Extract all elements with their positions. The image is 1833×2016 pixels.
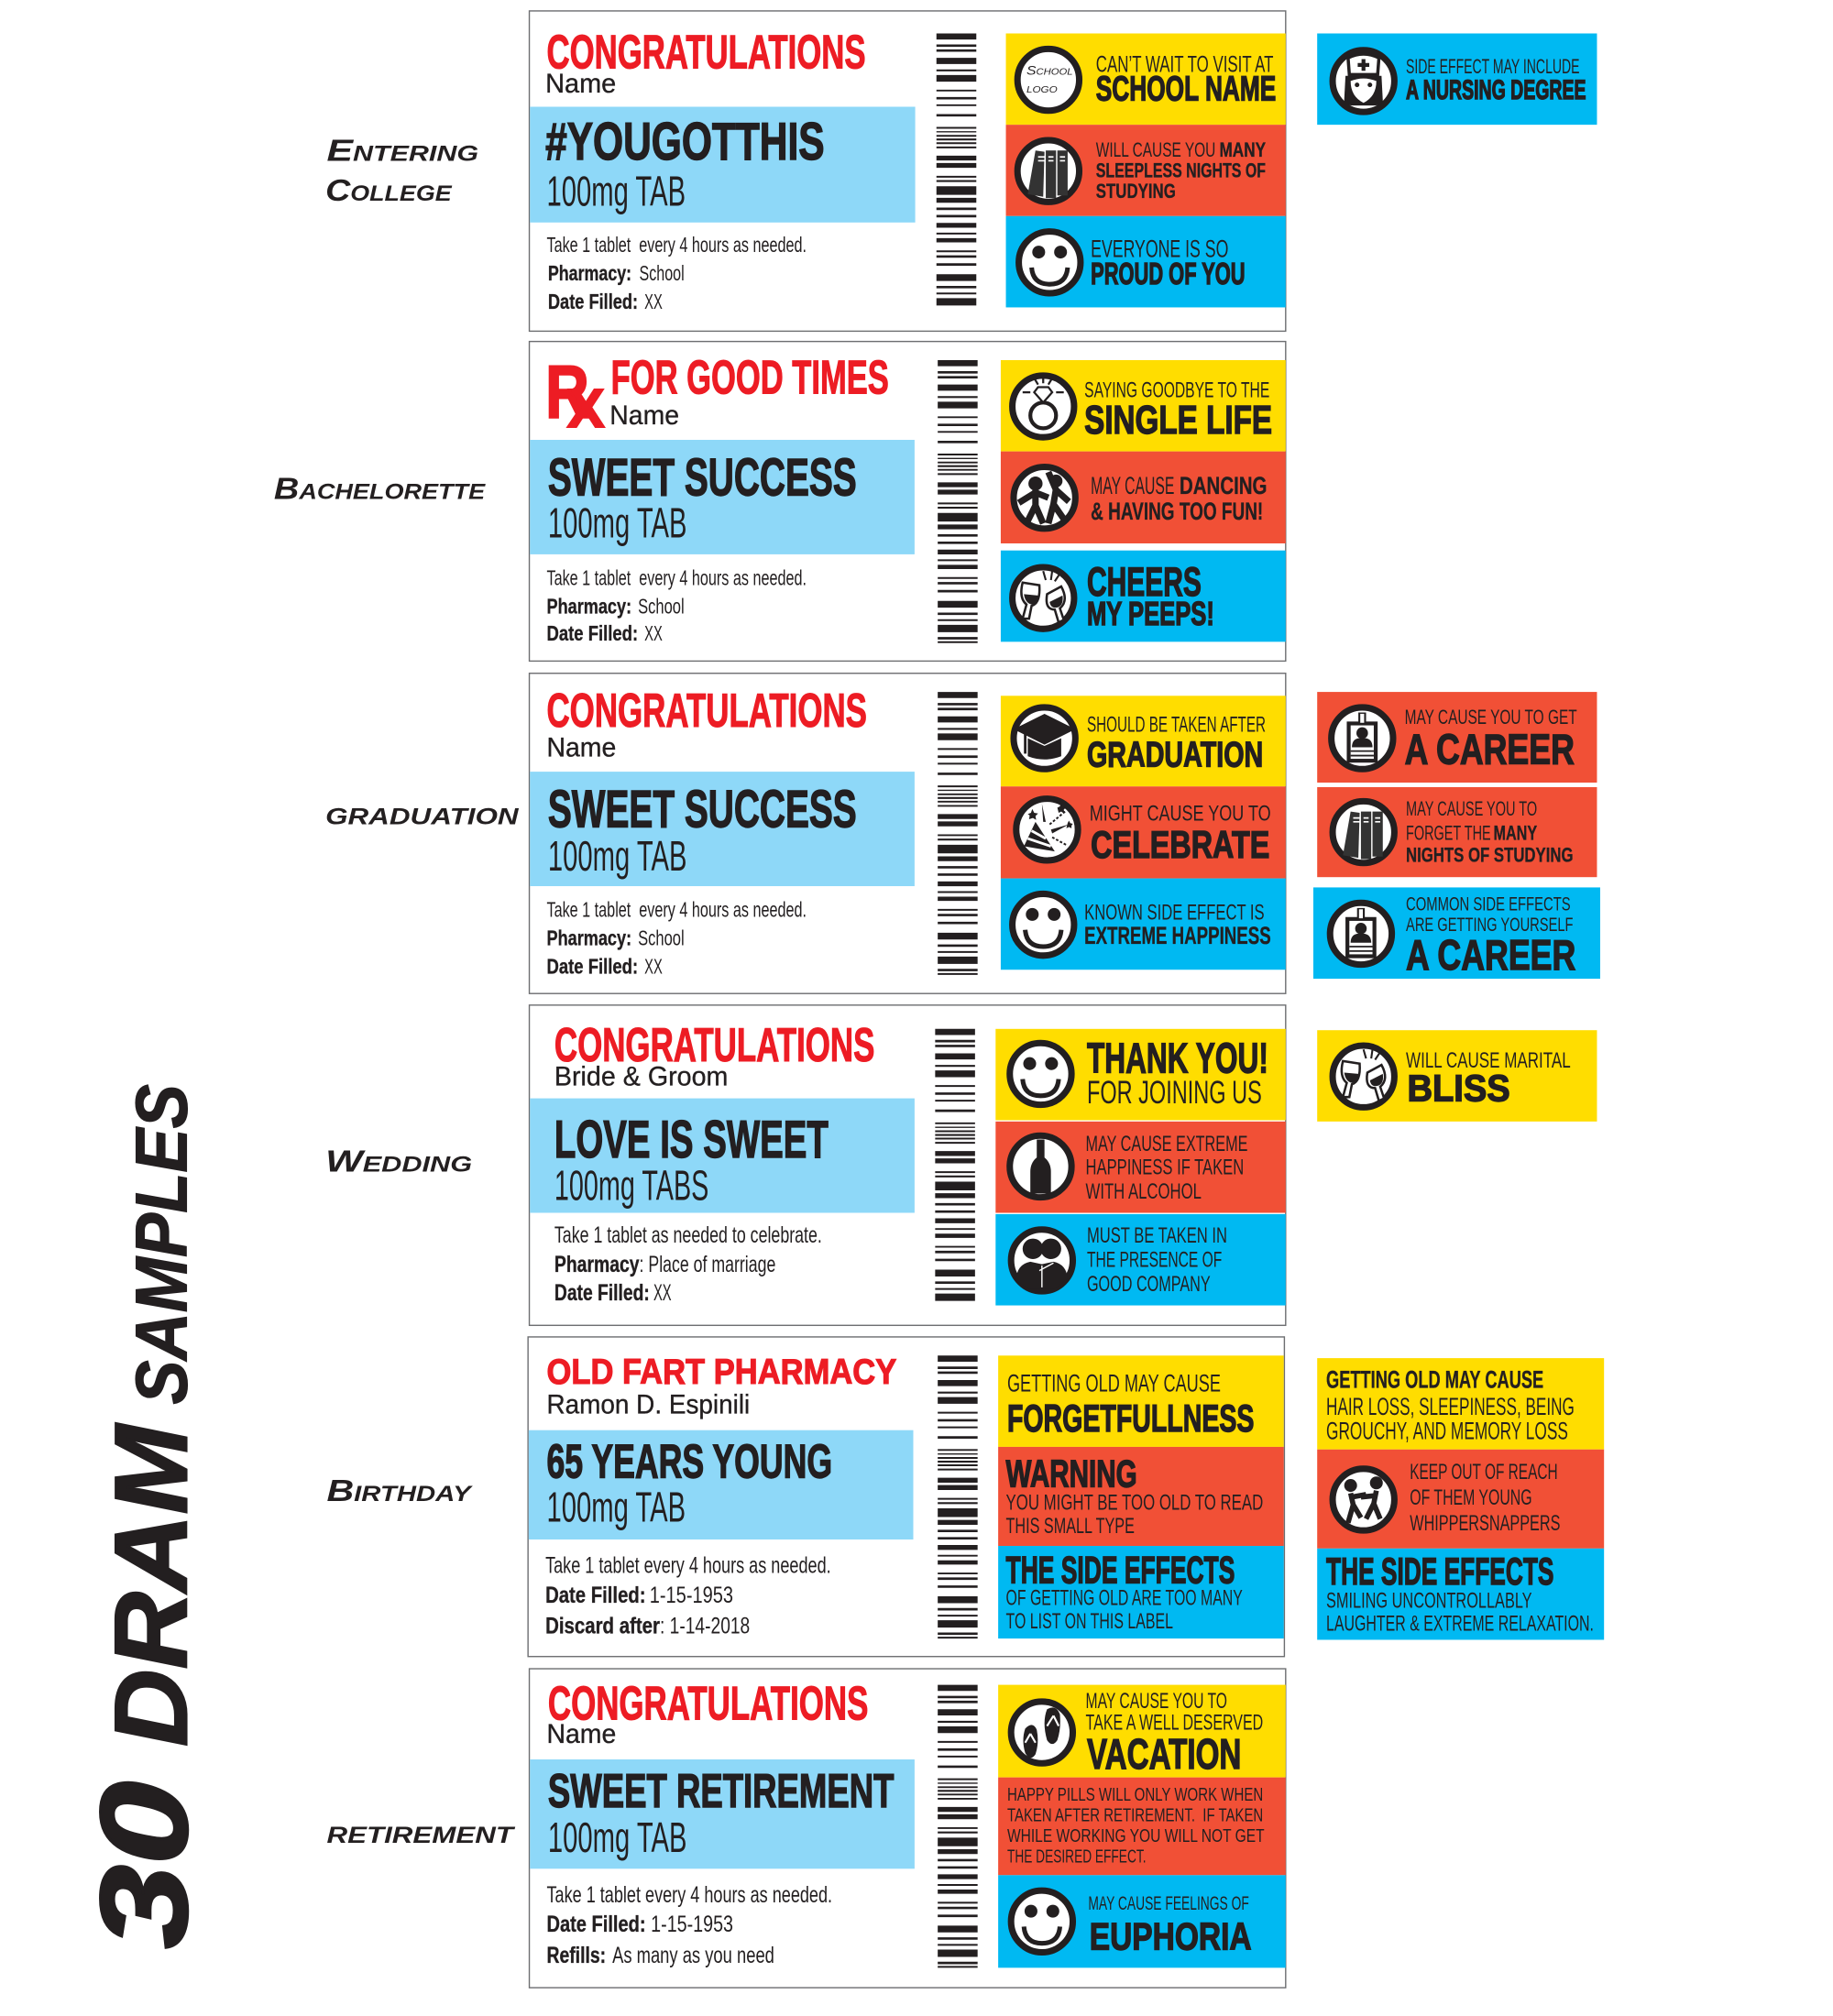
warning: too old to read: THIS SMALL TYPE bbox=[1006, 1514, 1135, 1539]
directions text: Refills: bbox=[546, 1944, 606, 1968]
sticker: getting old: GROUCHY, AND MEMORY LOSS bbox=[1326, 1418, 1568, 1445]
category label: entering college: College bbox=[325, 174, 453, 208]
directions text: : Place of marriage bbox=[640, 1253, 775, 1277]
sticker: a career: MAY CAUSE YOU TO GET bbox=[1405, 706, 1577, 729]
panel: bachelorette label bbox=[530, 342, 1286, 661]
directions text: Pharmacy bbox=[554, 1253, 640, 1277]
directions text: XX bbox=[644, 621, 663, 645]
warning: extreme happiness: KNOWN SIDE EFFECT IS bbox=[1084, 901, 1265, 926]
blue band: drug name: #YOUGOTTHIS bbox=[545, 113, 825, 171]
directions text: 1-15-1953 bbox=[650, 1583, 733, 1608]
warning: thank you: THANK YOU! bbox=[1087, 1035, 1268, 1082]
warning: vacation: VACATION bbox=[1087, 1730, 1241, 1778]
warning: extreme happiness bbox=[1001, 879, 1286, 970]
warning: school name: SCHOOL NAME bbox=[1096, 70, 1276, 108]
blue band: drug name: 100mg TAB bbox=[548, 499, 686, 547]
warning: the side effects: THE SIDE EFFECTS bbox=[1006, 1549, 1235, 1592]
blue band: drug name bbox=[530, 1759, 915, 1868]
side sticker: marital bliss bbox=[1317, 1030, 1597, 1122]
side sticker: nursing degree: A NURSING DEGREE bbox=[1406, 75, 1586, 105]
directions text: Pharmacy: bbox=[548, 261, 631, 285]
directions text bbox=[546, 566, 807, 645]
sticker: nights of studying: MAY CAUSE YOU TO bbox=[1406, 797, 1537, 820]
warning: alcohol: WITH ALCOHOL bbox=[1086, 1179, 1202, 1204]
sticker: the side effects: LAUGHTER & EXTREME RELAXATION. bbox=[1326, 1612, 1594, 1637]
warning: good company: MUST BE TAKEN IN bbox=[1087, 1223, 1227, 1248]
warning: euphoria: MAY CAUSE FEELINGS OF bbox=[1088, 1893, 1249, 1914]
sticker: a career bbox=[1317, 692, 1597, 783]
heading: for good times: FOR GOOD TIMES bbox=[611, 351, 889, 404]
warning: single life bbox=[1001, 360, 1286, 452]
category label: entering college: Entering bbox=[326, 134, 478, 168]
warning: the side effects: TO LIST ON THIS LABEL bbox=[1006, 1609, 1173, 1634]
warning: celebrate: MIGHT CAUSE YOU TO bbox=[1090, 801, 1271, 826]
warning: cheers bbox=[1001, 551, 1286, 641]
blue band: drug name: 100mg TAB bbox=[548, 832, 686, 880]
recipient name: Name bbox=[546, 732, 616, 762]
warning: alcohol: MAY CAUSE EXTREME bbox=[1086, 1132, 1247, 1156]
directions text: Date Filled: bbox=[548, 290, 638, 313]
recipient name: Name bbox=[545, 69, 616, 99]
heading: old fart pharmacy: OLD FART PHARMACY bbox=[546, 1352, 896, 1392]
panel: wedding label bbox=[530, 1005, 1286, 1325]
panel: entering college label bbox=[530, 11, 1286, 331]
category label: entering college bbox=[325, 134, 478, 208]
warning: happy pills bbox=[998, 1778, 1286, 1875]
heading: congratulations: CONGRATULATIONS bbox=[548, 1677, 868, 1730]
blue band: drug name bbox=[529, 1430, 913, 1539]
directions text: 1-15-1953 bbox=[651, 1912, 733, 1937]
directions text: Date Filled: bbox=[546, 1912, 646, 1937]
warning: sleepless nights: MANY bbox=[1220, 138, 1266, 161]
warning: thank you: FOR JOINING US bbox=[1087, 1075, 1262, 1111]
panel: birthday label bbox=[528, 1337, 1284, 1657]
blue band: drug name: LOVE IS SWEET bbox=[554, 1111, 829, 1169]
title: 30 dram samples: 30 bbox=[75, 1781, 214, 1948]
warning: graduation: GRADUATION bbox=[1087, 734, 1263, 774]
blue band: drug name: 65 YEARS YOUNG bbox=[546, 1436, 832, 1489]
barcode bbox=[938, 1685, 978, 1967]
sticker: nights of studying: NIGHTS OF STUDYING bbox=[1406, 843, 1573, 866]
blue band: drug name bbox=[530, 106, 916, 223]
sticker: getting old: GETTING OLD MAY CAUSE bbox=[1326, 1365, 1543, 1393]
warning: too old to read: WARNING bbox=[1006, 1452, 1137, 1495]
sticker: nights of studying bbox=[1317, 787, 1597, 877]
barcode bbox=[938, 692, 978, 975]
warning: dancing: DANCING bbox=[1180, 472, 1267, 499]
directions text bbox=[546, 233, 807, 313]
warning: school name: School bbox=[1026, 62, 1073, 77]
warning: forgetfullness: FORGETFULLNESS bbox=[1007, 1397, 1254, 1440]
warning: sleepless nights bbox=[1006, 125, 1286, 216]
directions text bbox=[554, 1223, 822, 1306]
directions text bbox=[546, 898, 807, 978]
directions text: XX bbox=[644, 290, 663, 313]
directions text: As many as you need bbox=[612, 1944, 774, 1968]
warning: extreme happiness: EXTREME HAPPINESS bbox=[1084, 922, 1271, 949]
directions text: Take 1 tablet every 4 hours as needed. bbox=[545, 1553, 831, 1578]
sticker: getting old: HAIR LOSS, SLEEPINESS, BEING bbox=[1326, 1393, 1575, 1420]
rx symbol: R bbox=[545, 351, 589, 434]
side stickers: birthday bbox=[1317, 1358, 1604, 1639]
sticker: getting old bbox=[1317, 1358, 1604, 1450]
warning: the side effects: OF GETTING OLD ARE TOO MANY bbox=[1006, 1586, 1243, 1611]
recipient name: Name bbox=[609, 400, 679, 431]
directions text: School bbox=[638, 926, 685, 950]
directions text: School bbox=[640, 261, 685, 285]
directions text: Pharmacy: bbox=[546, 926, 631, 950]
sticker: a career: A CAREER bbox=[1405, 726, 1575, 773]
warning: good company bbox=[995, 1214, 1286, 1306]
warning: proud of you bbox=[1006, 216, 1286, 307]
directions text: Date Filled: bbox=[545, 1583, 646, 1608]
warning: graduation: SHOULD BE TAKEN AFTER bbox=[1087, 713, 1266, 738]
recipient name: Bride & Groom bbox=[554, 1062, 728, 1092]
blue band: drug name: SWEET RETIREMENT bbox=[548, 1765, 895, 1818]
warning: dancing bbox=[1001, 452, 1286, 543]
warning: cheers: MY PEEPS! bbox=[1087, 595, 1214, 632]
warning: celebrate: CELEBRATE bbox=[1091, 823, 1269, 866]
directions text: Take 1 tablet every 4 hours as needed. bbox=[546, 898, 807, 922]
warning: alcohol bbox=[995, 1122, 1286, 1213]
side sticker: marital bliss: BLISS bbox=[1407, 1067, 1510, 1109]
warning: school name: CAN’T WAIT TO VISIT AT bbox=[1096, 52, 1273, 78]
barcode bbox=[937, 33, 976, 305]
sticker: common side effects: A CAREER bbox=[1406, 931, 1575, 979]
blue band: drug name: 100mg TAB bbox=[548, 1813, 686, 1861]
warning: good company: GOOD COMPANY bbox=[1087, 1272, 1211, 1297]
warning: celebrate bbox=[1001, 786, 1286, 879]
blue band: drug name: 100mg TABS bbox=[554, 1161, 708, 1209]
warning: euphoria: EUPHORIA bbox=[1090, 1915, 1252, 1958]
blue band: drug name: 100mg TAB bbox=[546, 168, 686, 215]
directions text: Take 1 tablet every 4 hours as needed. bbox=[546, 1883, 832, 1908]
side stickers: graduation bbox=[1313, 692, 1600, 979]
sticker: the side effects: SMILING UNCONTROLLABLY bbox=[1326, 1588, 1532, 1613]
side sticker: nursing degree bbox=[1317, 33, 1597, 125]
warning: sleepless nights: SLEEPLESS NIGHTS OF bbox=[1096, 159, 1266, 182]
blue band: drug name: 100mg TAB bbox=[546, 1483, 686, 1530]
directions text: Date Filled: bbox=[546, 954, 638, 978]
directions text: Take 1 tablet every 4 hours as needed. bbox=[546, 566, 807, 590]
directions text: Pharmacy: bbox=[546, 594, 631, 618]
warning: graduation bbox=[1001, 696, 1286, 786]
sticker: nights of studying: MANY bbox=[1493, 821, 1537, 844]
warning: the side effects bbox=[998, 1546, 1284, 1638]
blue band: drug name bbox=[530, 440, 915, 554]
recipient name: Name bbox=[546, 1719, 616, 1749]
blue band: drug name bbox=[530, 772, 915, 886]
sticker: the side effects: THE SIDE EFFECTS bbox=[1326, 1550, 1553, 1593]
directions text: Date Filled: bbox=[554, 1281, 650, 1306]
directions text: Discard after bbox=[545, 1614, 660, 1638]
side sticker: nursing degree: SIDE EFFECT MAY INCLUDE bbox=[1406, 55, 1580, 78]
warning: too old to read: YOU MIGHT BE TOO OLD TO READ bbox=[1006, 1491, 1263, 1516]
sticker: whippersnappers: KEEP OUT OF REACH bbox=[1410, 1460, 1558, 1485]
sticker: the side effects bbox=[1317, 1549, 1604, 1639]
warning: happy pills: HAPPY PILLS WILL ONLY WORK WHEN bbox=[1007, 1785, 1263, 1805]
warning: too old to read bbox=[998, 1447, 1284, 1546]
warning: single life: SINGLE LIFE bbox=[1084, 399, 1272, 443]
warning: vacation bbox=[998, 1685, 1286, 1778]
warning: vacation: TAKE A WELL DESERVED bbox=[1086, 1711, 1263, 1736]
title: 30 dram samples bbox=[75, 1084, 214, 1948]
warning: dancing: & HAVING TOO FUN! bbox=[1091, 498, 1263, 525]
sticker: common side effects bbox=[1313, 887, 1600, 979]
title: 30 dram samples: DRAM bbox=[93, 1423, 209, 1747]
warning: thank you bbox=[995, 1029, 1286, 1120]
panel: retirement label bbox=[530, 1669, 1286, 1988]
warning: proud of you: EVERYONE IS SO bbox=[1091, 236, 1228, 263]
sticker: whippersnappers bbox=[1317, 1450, 1604, 1549]
category label: birthday: Birthday bbox=[326, 1474, 473, 1508]
warning: cheers: CHEERS bbox=[1087, 558, 1202, 605]
directions text: School bbox=[638, 594, 685, 618]
warning: sleepless nights: STUDYING bbox=[1096, 180, 1176, 203]
warning: proud of you: PROUD OF YOU bbox=[1091, 257, 1246, 291]
directions text: Take 1 tablet every 4 hours as needed. bbox=[546, 233, 807, 257]
warning: dancing: MAY CAUSE bbox=[1091, 472, 1174, 499]
directions text bbox=[545, 1553, 831, 1638]
warning: school name bbox=[1006, 33, 1286, 125]
sticker: whippersnappers: WHIPPERSNAPPERS bbox=[1410, 1511, 1560, 1536]
sticker: common side effects: COMMON SIDE EFFECTS bbox=[1406, 894, 1571, 915]
blue band: drug name: SWEET SUCCESS bbox=[548, 448, 857, 507]
warning: sleepless nights: WILL CAUSE YOU bbox=[1096, 138, 1215, 161]
warning: single life: SAYING GOODBYE TO THE bbox=[1084, 378, 1269, 403]
panel: graduation label bbox=[530, 674, 1286, 993]
warning: happy pills: WHILE WORKING YOU WILL NOT GET bbox=[1007, 1826, 1265, 1846]
warning: good company: THE PRESENCE OF bbox=[1087, 1247, 1222, 1272]
heading: congratulations: CONGRATULATIONS bbox=[546, 685, 867, 738]
sticker: nights of studying: FORGET THE bbox=[1406, 821, 1491, 844]
blue band: drug name: SWEET SUCCESS bbox=[548, 780, 857, 838]
title: 30 dram samples: SAMPLES bbox=[121, 1084, 203, 1405]
warning: forgetfullness bbox=[998, 1355, 1284, 1447]
directions text: XX bbox=[644, 954, 663, 978]
category label: bachelorette: Bachelorette bbox=[274, 473, 486, 507]
warning: forgetfullness: GETTING OLD MAY CAUSE bbox=[1007, 1370, 1221, 1397]
directions text: Date Filled: bbox=[546, 621, 638, 645]
category label: graduation: GRADUATION bbox=[325, 805, 520, 830]
sticker: common side effects: ARE GETTING YOURSELF bbox=[1406, 915, 1574, 936]
category label: retirement: RETIREMENT bbox=[326, 1823, 516, 1848]
warning: alcohol: HAPPINESS IF TAKEN bbox=[1086, 1155, 1244, 1179]
directions text: Take 1 tablet as needed to celebrate. bbox=[554, 1223, 822, 1248]
warning: euphoria bbox=[998, 1875, 1286, 1967]
warning: happy pills: THE DESIRED EFFECT. bbox=[1007, 1846, 1147, 1867]
heading: congratulations: CONGRATULATIONS bbox=[554, 1019, 874, 1072]
heading: congratulations: CONGRATULATIONS bbox=[546, 26, 866, 79]
barcode bbox=[935, 1029, 975, 1301]
directions text: XX bbox=[653, 1281, 672, 1306]
directions text: : 1-14-2018 bbox=[660, 1614, 750, 1638]
barcode bbox=[938, 360, 978, 643]
warning: happy pills: TAKEN AFTER RETIREMENT. IF TAKEN bbox=[1007, 1805, 1263, 1825]
barcode bbox=[938, 1355, 978, 1638]
blue band: drug name bbox=[530, 1099, 915, 1213]
directions text bbox=[546, 1883, 832, 1968]
recipient name: Ramon D. Espinili bbox=[546, 1389, 750, 1419]
category label: wedding: Wedding bbox=[325, 1145, 472, 1179]
sticker: whippersnappers: OF THEM YOUNG bbox=[1410, 1485, 1532, 1510]
rx symbol: X bbox=[567, 379, 605, 439]
warning: school name: logo bbox=[1026, 81, 1058, 95]
warning: vacation: MAY CAUSE YOU TO bbox=[1086, 1689, 1227, 1714]
side sticker: marital bliss: WILL CAUSE MARITAL bbox=[1406, 1048, 1571, 1073]
